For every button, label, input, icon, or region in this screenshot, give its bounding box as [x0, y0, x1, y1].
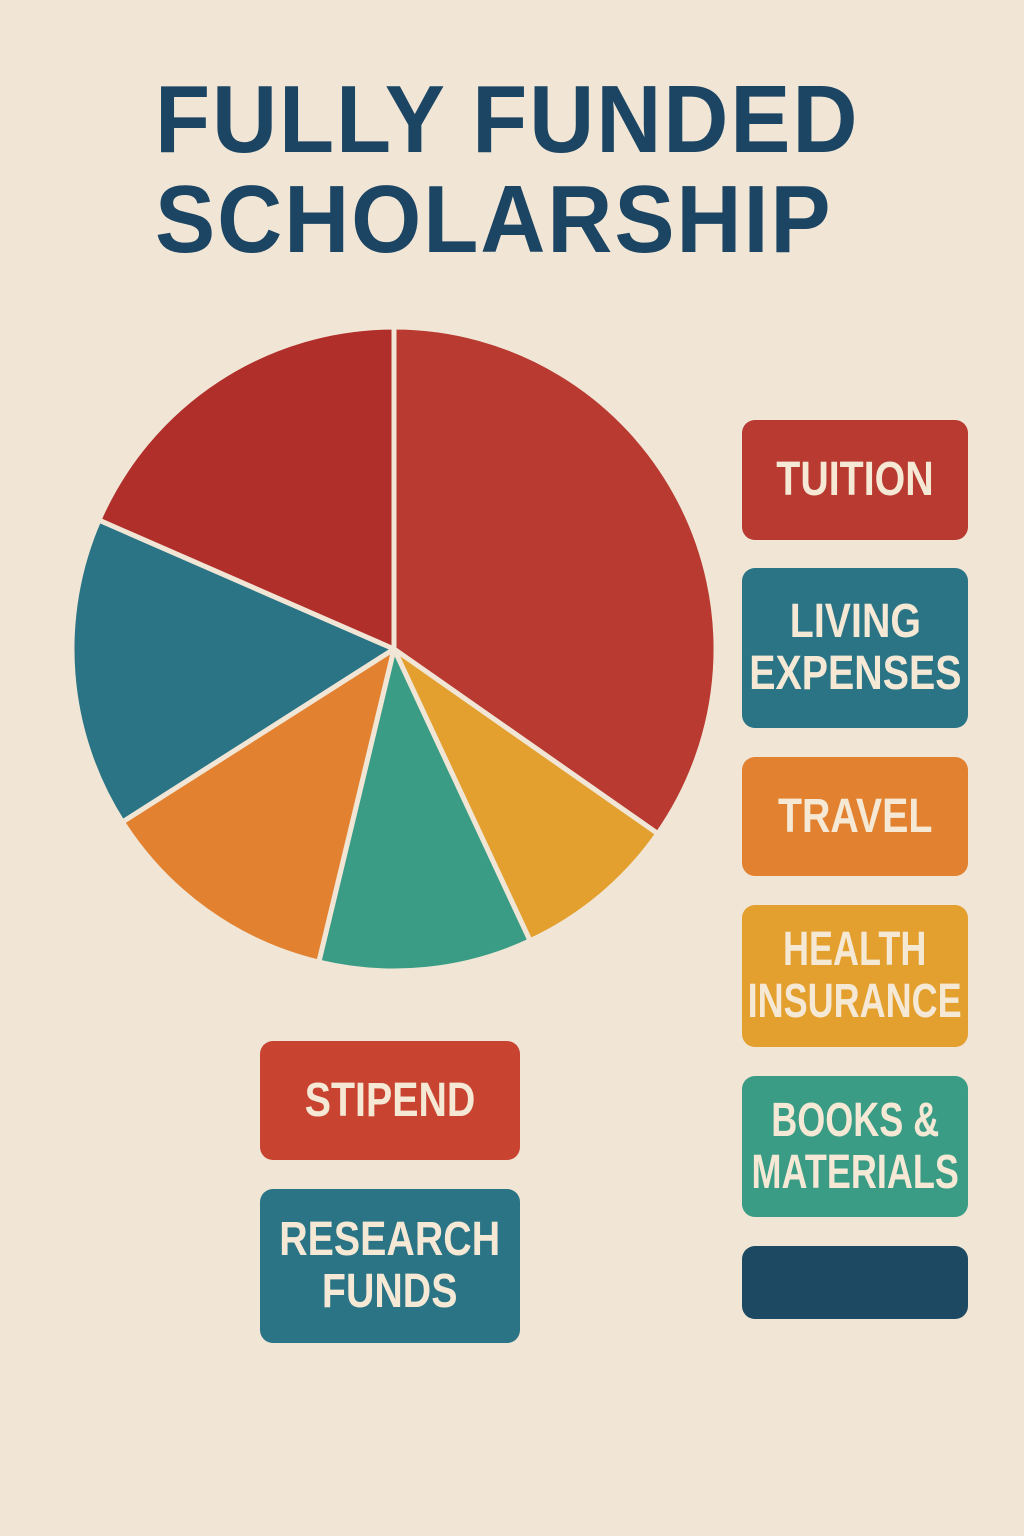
- legend: research funds: [260, 1189, 520, 1343]
- legend: blank dark: [742, 1246, 968, 1319]
- legend: books & materials: BOOKS &: [771, 1094, 939, 1146]
- legend: travel: TRAVEL: [778, 790, 932, 842]
- legend: health insurance: INSURANCE: [748, 975, 962, 1028]
- legend: books & materials: [742, 1076, 968, 1217]
- legend: books & materials: MATERIALS: [751, 1146, 959, 1198]
- title: FULLY FUNDED: [155, 66, 859, 173]
- title: SCHOLARSHIP: [155, 166, 832, 273]
- legend: living expenses: EXPENSES: [749, 647, 961, 700]
- legend: tuition: [742, 420, 968, 540]
- title: [155, 66, 859, 273]
- legend: living expenses: LIVING: [789, 595, 921, 648]
- legend: stipend: STIPEND: [305, 1074, 475, 1126]
- legend: research funds: RESEARCH: [280, 1213, 500, 1266]
- legend: living expenses: [742, 568, 968, 728]
- legend: health insurance: [742, 905, 968, 1047]
- legend: health insurance: HEALTH: [783, 923, 927, 976]
- legend: tuition: TUITION: [776, 453, 934, 506]
- legend: travel: [742, 757, 968, 876]
- legend: stipend: [260, 1041, 520, 1160]
- legend: research funds: FUNDS: [322, 1265, 458, 1318]
